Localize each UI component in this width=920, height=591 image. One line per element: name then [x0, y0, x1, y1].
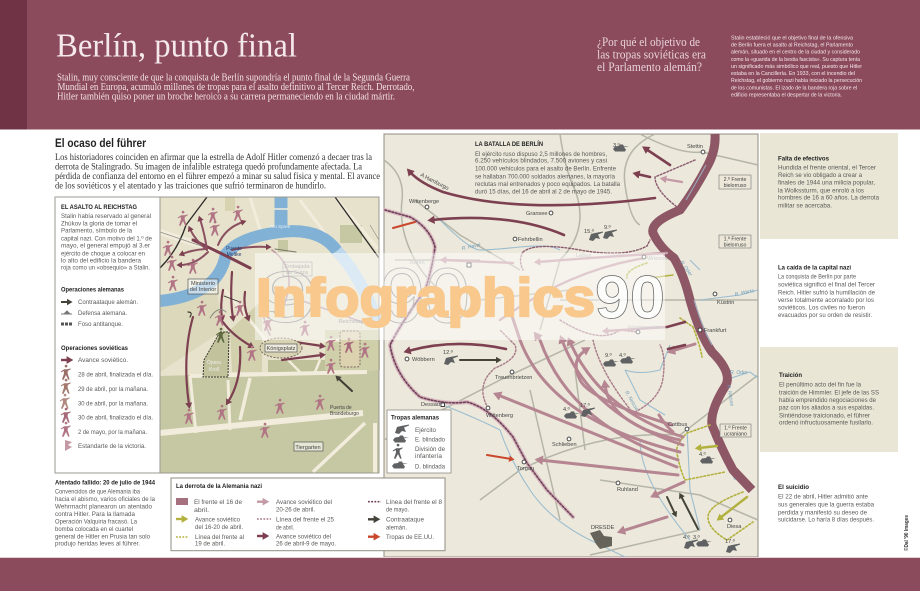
place labels: Königsplatz	[267, 346, 296, 352]
panel: lack of troops: Hundida el frente oriental, el Tercer	[778, 164, 876, 171]
German operations legend: Operaciones alemanas	[61, 286, 124, 294]
panel: German troops legend: Tropas alemanas	[391, 414, 439, 422]
German army markers: 4.º	[619, 352, 626, 359]
legend column 3: Contraataque	[386, 516, 424, 524]
legend column 3: de mayo.	[386, 506, 409, 514]
assault text: capital nazi. Con motivo del 1.º de	[61, 235, 152, 242]
text block: failed attempt: Wehrmacht planearon un atentado	[55, 504, 152, 511]
place labels: Tiergarten	[295, 445, 321, 451]
panel: betrayal: ordenó infructuosamente fusilarlo.	[779, 420, 873, 427]
legend column 1	[176, 498, 244, 548]
place labels: Puerta de	[330, 405, 352, 411]
Soviet operations legend: 28 de abril, finalizada el día.	[78, 372, 153, 378]
panel: fall of the capital: Reich. Hitler sufrió la humillación de	[778, 289, 875, 296]
legend column 2: Línea del frente el 25	[276, 516, 334, 524]
towns: Wöbbern	[412, 357, 435, 363]
towns: Cottbus	[668, 422, 687, 428]
text block: failed attempt: Operación Valquiria fracasó. La	[55, 518, 137, 525]
soviet fan arrows	[498, 310, 695, 531]
panel: German troops legend: E. blindado	[415, 436, 445, 444]
US troops arrows	[393, 222, 511, 459]
legend column 2: Avance soviético del	[276, 499, 332, 506]
panel: fall of the capital: evacuados por su orden de resistir.	[778, 312, 872, 319]
place labels: Reichstag	[339, 319, 363, 325]
Soviet operations legend: Operaciones soviéticas	[61, 345, 128, 352]
heading: EL ASALTO AL REICHSTAG	[61, 204, 137, 211]
panel: fall of the capital: soviéticos. Los civiles no fueron	[778, 305, 865, 312]
towns: R. Neisse	[623, 390, 639, 412]
panel: lack of troops: Falta de efectivos	[778, 156, 829, 162]
Konigsplatz	[260, 338, 302, 358]
place labels: Kroll	[209, 367, 219, 373]
front labels: bielorruso	[724, 183, 747, 189]
place labels: de Suiza	[286, 270, 309, 276]
footer band	[0, 557, 920, 591]
railways	[160, 197, 379, 268]
panel: lack of troops: militar se acercaba.	[778, 202, 832, 209]
towns: R. Warta	[734, 288, 755, 298]
battle text	[475, 139, 620, 196]
place labels: Embajada	[284, 264, 310, 270]
panel: lack of troops: finales de 1944 una milicia popular,	[778, 180, 875, 187]
intro text: Hitler también quiso poner un broche heroico a su carrera permaneciendo en la ciudad mártir.	[57, 92, 395, 102]
river Spree	[160, 197, 379, 325]
German operations legend	[61, 286, 138, 328]
German army markers: 4.º	[683, 534, 690, 541]
title: Berlín, punto final	[56, 28, 297, 64]
front line on 16 April	[653, 134, 752, 490]
answer text: Reichstag, el gobierno nazi había iniciado la persecución	[731, 78, 862, 84]
Reichstag block	[340, 331, 360, 367]
panel: German troops legend: D. blindada	[415, 464, 445, 470]
assault text: ejército de choque a colocar en	[61, 250, 145, 257]
answer text: alemán, situado en el centro de la ciudad y considerado	[731, 50, 860, 56]
watermark: 9	[258, 258, 318, 338]
German army markers: 17.º	[580, 402, 590, 409]
header band	[0, 0, 920, 130]
panel: suicide: El suicidio	[778, 484, 809, 491]
battle text: duró 15 días, del 16 de abril al 2 de mayo de 1945.	[475, 189, 612, 196]
legend column 3: alemán.	[386, 524, 407, 532]
towns: Berlín	[410, 260, 425, 266]
towns: Treuenbrietzen	[495, 375, 532, 381]
panel: betrayal: había emprendido negociaciones de	[779, 397, 876, 404]
answer text: estaba en la Cancillería. En 1933, con el incendio del	[731, 71, 855, 77]
towns: Fürstenwalde	[628, 325, 662, 331]
section intro text: Los historiadores coinciden en afirmar que la estrella de Adolf Hitler comenzó a decaer tras la	[55, 152, 373, 163]
intro text	[57, 72, 414, 102]
legend column 3: Tropas de EE.UU.	[386, 534, 434, 541]
legend column 1: El frente el 16 de	[194, 499, 243, 506]
answer text: Stalin estableció que el objetivo final de la ofensiva	[731, 36, 854, 42]
panel: suicide: sus generales que la guerra estaba	[778, 502, 874, 509]
inset border	[55, 197, 379, 473]
panel: suicide: suicidarse. Lo haría 8 días después.	[778, 517, 874, 524]
question heading: ¿Por qué el objetivo de	[597, 34, 700, 49]
front labels	[719, 175, 751, 438]
answer text: edificio representaba el despertar de la victoria.	[731, 92, 842, 98]
panel: lack of troops: la Wolkssturm, que enroló a los	[778, 187, 864, 194]
watermark: Infographics	[256, 268, 595, 328]
text block: failed attempt: bomba colocada en el cuartel	[55, 526, 133, 533]
light Soviet advance arrows	[393, 149, 747, 531]
panel: Reichstag assault map	[160, 197, 380, 473]
German counterattack arrows	[460, 360, 698, 529]
towns: A Hamburgo	[419, 172, 450, 192]
answer text: de los comunistas. El izado de la bandera roja sobre el	[731, 85, 857, 91]
panel: betrayal	[760, 347, 898, 452]
section intro text	[55, 152, 380, 192]
German army markers: 4.º	[699, 451, 706, 458]
battle text: reclutas mal entrenados y poco equipados. La batalla	[475, 181, 620, 188]
battle text: 100.000 vehículos para el asalto de Berlín. Enfrente	[475, 166, 616, 173]
assault text: lo alto del edificio la bandera	[61, 258, 141, 265]
front lines	[385, 160, 753, 540]
panel: suicide	[778, 484, 874, 524]
legend column 2: Avance soviético del	[276, 534, 331, 540]
assault text: mayo, el general empujó al 3.er	[61, 242, 150, 250]
towns: Wriezen	[647, 256, 667, 262]
towns: R. Havel	[461, 242, 482, 252]
place labels: Brandeburgo	[330, 411, 359, 417]
Soviet operations legend: 2 de mayo, por la mañana.	[78, 429, 147, 436]
assault text: Stalin había reservado al general	[61, 213, 151, 220]
panel: Battle of Berlin map	[384, 134, 758, 557]
towns: Wittenberge	[409, 199, 439, 205]
front labels: 1.º Frente	[724, 426, 747, 432]
legend column 1: abril.	[194, 507, 209, 514]
legend column 2: 20-26 de abril.	[276, 506, 315, 514]
panel: betrayal: paz con los aliados a sus espaldas.	[779, 405, 874, 412]
towns: Lebus	[576, 253, 591, 259]
Soviet operations legend: 30 de abril, por la mañana.	[78, 400, 148, 408]
assault text: roja como un «obsequio» a Stalin.	[61, 265, 150, 272]
Opera Kroll block	[203, 328, 229, 377]
answer text: un significado más simbólico que real, puesto que Hitler	[731, 64, 862, 70]
panel: fall of the capital: soviética significó el final del Tercer	[778, 281, 875, 288]
front labels: ucraniano	[724, 432, 747, 438]
German army markers: 12.º	[443, 349, 453, 356]
assault text: Zhúkov la gloria de tomar el	[61, 220, 137, 227]
towns: Stettin	[687, 144, 703, 150]
watermark: 90	[380, 251, 470, 339]
place labels: del Interior	[190, 287, 216, 293]
towns: Ruhland	[617, 487, 638, 493]
panel: betrayal: traición de Himmler. El jefe de las SS	[779, 389, 879, 396]
German operations legend: Contraataque alemán.	[78, 299, 138, 306]
panel: fall of the capital: verse totalmente acorralado por los	[778, 297, 874, 304]
answer text	[731, 36, 862, 98]
legend column 3: Línea del frente el 8	[386, 499, 442, 506]
towns: R. Oder	[730, 370, 748, 376]
panel: Reichstag legend	[55, 197, 160, 473]
battle text: 6.250 vehículos blindados, 7.500 aviones y casi	[475, 158, 607, 165]
olive advance arrows	[650, 275, 747, 518]
towns: R. Neisse	[725, 384, 735, 407]
section intro text: de los soviéticos y el atentado y las traiciones que sufrió terminaron de hundirlo.	[55, 180, 326, 192]
text block: failed attempt: Convencidos de que Alemania iba	[55, 489, 140, 496]
German army markers: 15.º	[584, 228, 594, 235]
German army markers: 3.º	[613, 142, 620, 149]
legend column 2: 26 de abril-9 de mayo.	[276, 540, 336, 548]
German army markers: 4.º	[563, 406, 570, 413]
intro text: Mundial en Europa, acumuló millones de tropas para el asalto definitivo al Tercer Reich. Derrotado,	[58, 82, 414, 93]
German army markers: 9.º	[604, 224, 611, 231]
answer text: de Berlín fuera el asalto al Reichstag, el Parlamento	[731, 43, 853, 49]
panel: lack of troops: Reich se vio obligado a crear a	[778, 172, 862, 179]
front labels: bielorruso	[724, 242, 747, 248]
question heading: el Parlamento alemán?	[597, 59, 702, 74]
panel: German troops legend: infantería	[415, 453, 443, 460]
place labels: Ópera	[207, 359, 221, 366]
towns: DRESDE	[591, 525, 615, 531]
German operations legend: Defensa alemana.	[78, 310, 127, 317]
battle text: se hallaban 700.000 soldados alemanes, la mayoría	[475, 173, 615, 180]
panel: German troops legend	[387, 410, 451, 473]
German army markers: 17.º	[725, 538, 735, 545]
Soviet advance arrows	[180, 219, 362, 405]
section intro text: pérdida de confianza del entorno en el führer empezó a minar su salud física y mental. El avance	[55, 171, 380, 182]
text block: failed attempt: general de Hitler en Prusia tan solo	[55, 534, 150, 541]
soldier markers	[163, 206, 370, 438]
German army markers: 9.º	[605, 352, 612, 359]
panel: defeat of Nazi Germany legend	[171, 478, 445, 551]
panel: suicide: El 22 de abril, Hitler admitió ante	[778, 494, 868, 501]
question heading	[597, 34, 706, 74]
text block: failed attempt: Atentado fallido: 20 de julio de 1944	[55, 480, 155, 486]
panel: defeat of Nazi Germany legend: La derrota de la Alemania nazi	[176, 483, 262, 490]
text block: failed attempt: hacia el abismo, varios oficiales de la	[55, 496, 155, 503]
legend column 1: 19 de abril.	[195, 540, 225, 548]
streets	[160, 197, 379, 473]
text block: failed attempt: contra Hitler. Para la llamada	[55, 511, 135, 518]
place labels: Río Spree	[270, 224, 291, 229]
text block: failed attempt	[55, 480, 155, 548]
front labels: 2.º Frente	[724, 177, 746, 183]
battle text: LA BATALLA DE BERLÍN	[475, 139, 543, 148]
legend column 1: Línea del frente al	[195, 534, 244, 541]
panel: suicide: perdida y manifestó su deseo de	[778, 509, 867, 516]
park areas	[160, 197, 380, 473]
watermark	[255, 251, 665, 340]
place labels	[188, 224, 363, 451]
Soviet operations legend: Estandarte de la victoria.	[78, 443, 146, 450]
assault text: Parlamento, símbolo de la	[61, 228, 132, 235]
legend column 2: de abril.	[276, 524, 294, 532]
Soviet operations legend: 29 de abril, por la mañana.	[78, 386, 148, 393]
panel: betrayal: Traición	[779, 372, 802, 379]
panel: lack of troops: hombres de 16 a 60 años. La derrota	[778, 195, 879, 202]
German army markers	[443, 142, 740, 553]
Dresden city	[590, 530, 612, 549]
battle text: El ejército ruso dispuso 2,5 millones de hombres,	[475, 151, 607, 158]
place labels: Puente	[226, 246, 242, 252]
Soviet operations legend: 30 de abril, finalizado el día.	[78, 414, 153, 422]
section heading: El ocaso del führer	[55, 138, 146, 150]
panel: German troops legend: División de	[415, 446, 445, 453]
towns: Torgau	[517, 466, 534, 472]
towns: Frankfurt	[704, 328, 727, 334]
front labels: 1.º Frente	[724, 236, 746, 242]
towns	[405, 144, 755, 531]
towns: Wittenberg	[486, 413, 513, 419]
section intro text: derrota de Stalingrado. Su imagen de infalible estratega quedó profundamente afectada. La	[55, 162, 363, 172]
Soviet operations legend	[60, 345, 153, 451]
legend column 1: Avance soviético	[195, 516, 240, 524]
legend column 3	[368, 499, 442, 541]
watermark: 90	[595, 264, 665, 331]
towns: Fehrbellin	[518, 237, 543, 243]
panel: German troops legend: Ejército	[415, 427, 436, 434]
towns: Diesa	[727, 524, 742, 530]
dark Soviet advance arrows	[408, 149, 685, 351]
towns: Dessau	[421, 402, 440, 408]
German army markers: 3.º	[693, 534, 700, 541]
roads	[384, 134, 758, 555]
towns: Küstrin	[717, 300, 734, 306]
panel: lack of troops	[760, 133, 898, 239]
panel: fall of the capital: La caída de la capital nazi	[778, 264, 851, 272]
text block: failed attempt: produjo heridas leves al führer.	[55, 541, 140, 548]
towns: Schlieben	[552, 442, 577, 448]
place labels: Ministerio	[191, 281, 215, 287]
towns: R. Oder	[678, 260, 694, 278]
Soviet operations legend: Avance soviético.	[78, 357, 128, 364]
place labels: Moltke	[227, 252, 242, 258]
German operations legend: Foso antitanque.	[78, 321, 123, 328]
panel: fall of the capital	[778, 264, 875, 319]
intro text: Stalin, muy consciente de que la conquista de Berlín supondría el punto final de la Segunda Guerra	[57, 72, 410, 84]
photo credit: ©Dal '90 Images	[903, 515, 910, 551]
towns: Gransee	[526, 211, 547, 217]
rivers	[430, 220, 758, 557]
panel: betrayal: El penúltimo acto del fin fue la	[779, 382, 861, 389]
panel: betrayal: Sintiéndose traicionado, el führer	[779, 412, 870, 419]
legend column 1: del 16-20 de abril.	[195, 524, 243, 531]
assault text	[61, 213, 152, 272]
panel: fall of the capital: La conquista de Berlín por parte	[778, 274, 856, 281]
legend column 2	[257, 499, 336, 548]
answer text: como la «guarida de la bestia fascista». Su captura tenía	[731, 57, 861, 63]
question heading: las tropas soviéticas era	[597, 46, 706, 62]
